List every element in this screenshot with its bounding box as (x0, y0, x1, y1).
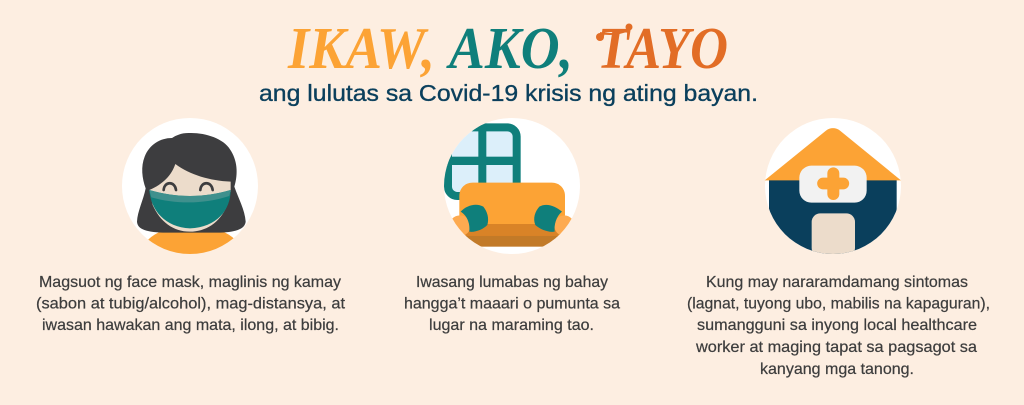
subtitle: ang lulutas sa Covid-19 krisis ng ating bayan. (259, 80, 758, 106)
title: TAYO (597, 15, 728, 81)
text block: consult health worker advice: kanyang mga tanong. (760, 361, 914, 378)
window (443, 123, 518, 197)
text block: stay at home advice: hangga’t maaari o pumunta sa (404, 296, 620, 312)
sofa (449, 183, 574, 247)
icon: health center building (765, 118, 901, 257)
text block: stay at home advice (404, 274, 620, 334)
text block: prevention advice: iwasan hawakan ang mata, ilong, at bibig. (42, 317, 339, 334)
text block: consult health worker advice: worker at maging tapat sa pagsagot sa (695, 339, 977, 356)
text block: consult health worker advice: Kung may nararamdamang sintomas (706, 274, 968, 291)
text block: consult health worker advice: sumangguni sa inyong local healthcare (697, 317, 977, 334)
text block: prevention advice: Magsuot ng face mask, maglinis ng kamay (39, 274, 341, 291)
title: IKAW, (287, 15, 435, 81)
text block: consult health worker advice: (lagnat, tuyong ubo, mabilis na kapaguran), (687, 296, 990, 312)
text block: prevention advice: (sabon at tubig/alcohol), mag-distansya, at (36, 296, 346, 312)
title (287, 15, 728, 81)
icon: woman wearing face mask (122, 118, 258, 254)
icon: person staying home on sofa by a window (443, 118, 580, 254)
text block: consult health worker advice (687, 274, 990, 378)
text block: stay at home advice: Iwasang lumabas ng bahay (416, 274, 608, 291)
text block: stay at home advice: lugar na maraming tao. (429, 317, 594, 334)
title: AKO, (445, 15, 573, 81)
text block: prevention advice (36, 274, 346, 334)
